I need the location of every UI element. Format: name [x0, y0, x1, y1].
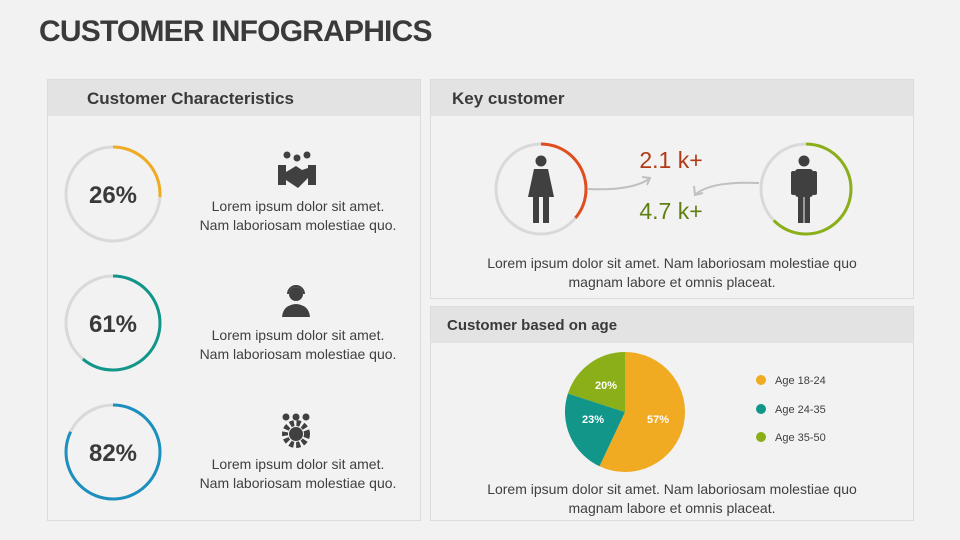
legend [756, 375, 826, 444]
icon: team gear [282, 414, 310, 448]
pie chart [565, 352, 685, 472]
ring 26% [64, 146, 162, 242]
pie chart: 20% [595, 380, 617, 392]
heading: customer characteristics [48, 80, 420, 116]
text 2 [200, 327, 396, 362]
text 2: Nam laboriosam molestiae quo. [200, 346, 396, 362]
icon: support agent [282, 285, 310, 317]
item 3 [64, 404, 396, 500]
panel: key customer [430, 79, 914, 299]
pie chart: 57% [647, 414, 669, 426]
text 1: Nam laboriosam molestiae quo. [200, 217, 396, 233]
heading: customer characteristics: Customer Characteristics [87, 89, 294, 108]
title: CUSTOMER INFOGRAPHICS [39, 15, 432, 48]
heading: key customer: Key customer [452, 89, 564, 108]
text: key customer: Lorem ipsum dolor sit amet. Nam laboriosam molestiae quo [487, 255, 857, 271]
ring 61%: 61% [89, 311, 137, 338]
ring 61% [64, 274, 162, 372]
item 2 [64, 274, 396, 372]
diagram: female vs male: 4.7 k+ [639, 198, 703, 224]
text 1 [200, 198, 396, 233]
arrows [588, 177, 759, 195]
text 2: Lorem ipsum dolor sit amet. [212, 327, 384, 343]
text: age [487, 481, 857, 516]
text: age: magnam labore et omnis placeat. [568, 500, 776, 516]
text 3 [200, 456, 396, 491]
heading: age: Customer based on age [447, 317, 617, 334]
icon: handshake group [278, 152, 316, 188]
ring 26%: 26% [89, 182, 137, 209]
heading: key customer [431, 80, 913, 116]
female ring [496, 144, 586, 234]
ring 82%: 82% [89, 440, 137, 467]
legend: Age 18-24 [775, 375, 826, 387]
panel: customer based on age [430, 306, 914, 521]
legend: Age 35-50 [775, 432, 826, 444]
text 3: Lorem ipsum dolor sit amet. [212, 456, 384, 472]
text: age: Lorem ipsum dolor sit amet. Nam laboriosam molestiae quo [487, 481, 857, 497]
legend: Age 24-35 [775, 404, 826, 416]
item 1 [64, 146, 396, 242]
male ring [761, 144, 851, 234]
heading: age [431, 307, 913, 343]
text: key customer: magnam labore et omnis placeat. [568, 274, 776, 290]
pie chart: 23% [582, 414, 604, 426]
text 1: Lorem ipsum dolor sit amet. [212, 198, 384, 214]
text: key customer [487, 255, 857, 290]
ring 82% [64, 404, 162, 500]
text 3: Nam laboriosam molestiae quo. [200, 475, 396, 491]
diagram: female vs male [494, 142, 852, 236]
panel: customer characteristics [47, 79, 421, 521]
values: 2.1 k+ [639, 147, 703, 173]
